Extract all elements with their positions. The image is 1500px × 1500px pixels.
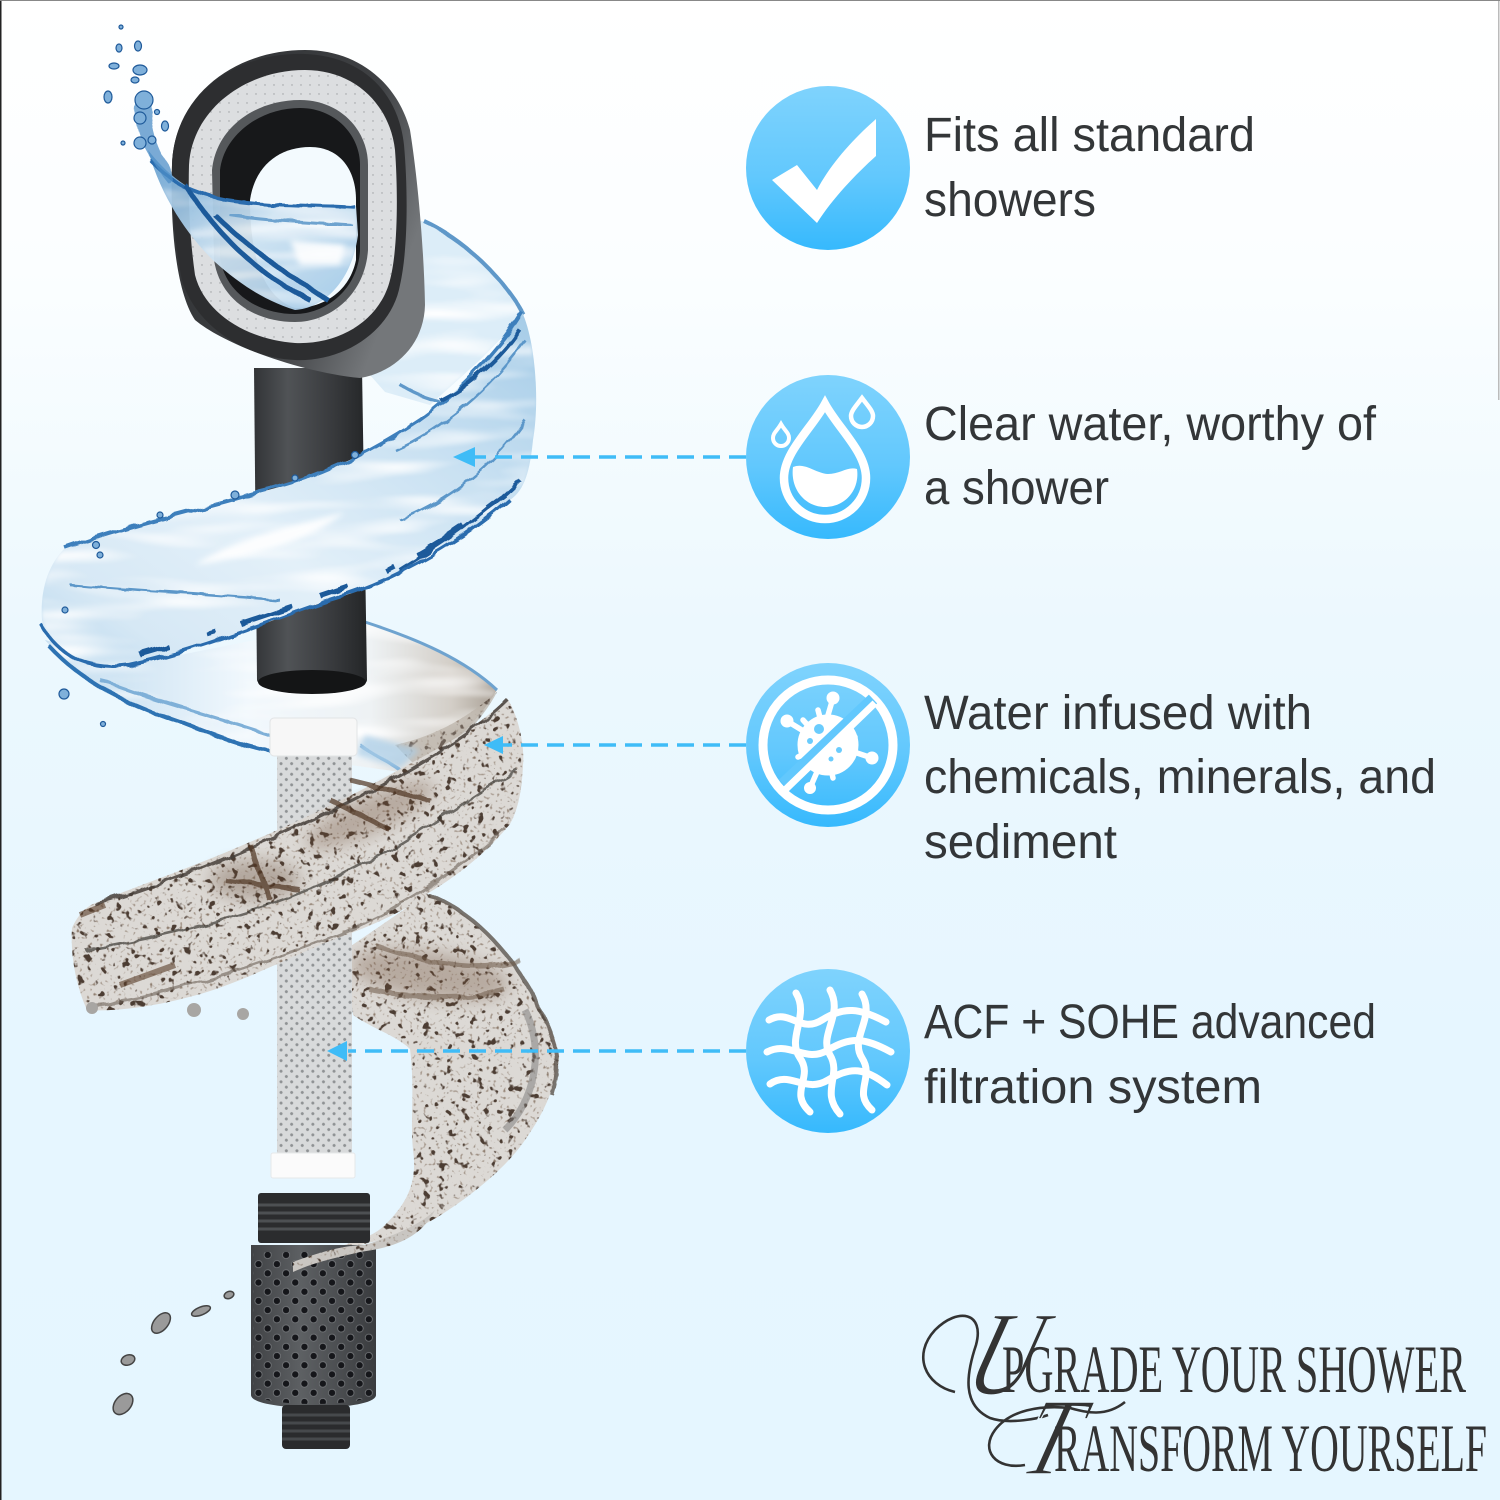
feature text: filtration system: filtration system <box>924 1061 1262 1114</box>
perforated collar <box>251 1245 376 1408</box>
pipe of shower head <box>254 368 367 694</box>
bottom white cap <box>271 1153 355 1178</box>
feature text: clear water: a shower <box>924 462 1109 515</box>
carbon mesh <box>277 752 352 1156</box>
head body <box>172 50 425 378</box>
feature text: filtration system: ACF + SOHE advanced <box>924 996 1376 1049</box>
icon: no contaminants <box>746 663 910 827</box>
arrow: filter callout <box>327 1041 746 1061</box>
bottom thread <box>282 1405 350 1449</box>
icon: check mark <box>746 86 910 250</box>
water ribbon: lower clean section <box>45 622 497 772</box>
slogan line one: U <box>946 1288 1071 1421</box>
arrow: contaminated water callout <box>484 736 746 754</box>
slogan <box>923 1288 1487 1498</box>
icon: filtration mesh <box>746 969 910 1133</box>
opening <box>250 147 356 308</box>
shower head <box>172 50 425 378</box>
top white cap <box>270 718 357 756</box>
feature text: contaminated water <box>924 687 1436 869</box>
feature text: clear water <box>924 398 1377 515</box>
product illustration: shower head, filter and water ribbon <box>42 25 559 1449</box>
feature text: clear water: Clear water, worthy of <box>924 398 1377 451</box>
feature text: contaminated water: sediment <box>924 816 1117 869</box>
threads <box>258 1193 370 1243</box>
feature text: fits all standard showers <box>924 109 1255 227</box>
dirty water tail over collar <box>293 1210 435 1272</box>
slogan line one <box>923 1288 1466 1421</box>
highlight <box>195 512 345 565</box>
cavity <box>220 108 360 314</box>
icon: water drop <box>746 375 910 539</box>
water ribbon: front section <box>42 312 536 667</box>
feature text: fits all standard showers: Fits all standard <box>924 109 1255 162</box>
feature text: contaminated water: Water infused with <box>924 687 1312 740</box>
filter cartridge <box>270 718 357 1178</box>
slogan line two: T <box>1001 1376 1108 1498</box>
lower adapter <box>251 1193 376 1449</box>
slogan line two <box>989 1376 1487 1498</box>
splash stream <box>135 100 174 185</box>
arrow: clear water callout <box>453 447 746 467</box>
dirty water ribbon: lower section <box>293 894 559 1262</box>
feature text: filtration system <box>924 996 1376 1114</box>
dirty water ribbon: upper section <box>72 698 523 1020</box>
inner rim <box>212 100 368 322</box>
water splash droplets <box>59 25 358 726</box>
dirty water droplets <box>109 1290 235 1418</box>
feature text: contaminated water: chemicals, minerals, and <box>924 751 1436 804</box>
spray ring <box>189 70 397 343</box>
face rim <box>172 54 407 360</box>
feature text: fits all standard showers: showers <box>924 174 1096 227</box>
water band across the head <box>135 100 358 310</box>
water ribbon: upper back section <box>370 215 524 405</box>
